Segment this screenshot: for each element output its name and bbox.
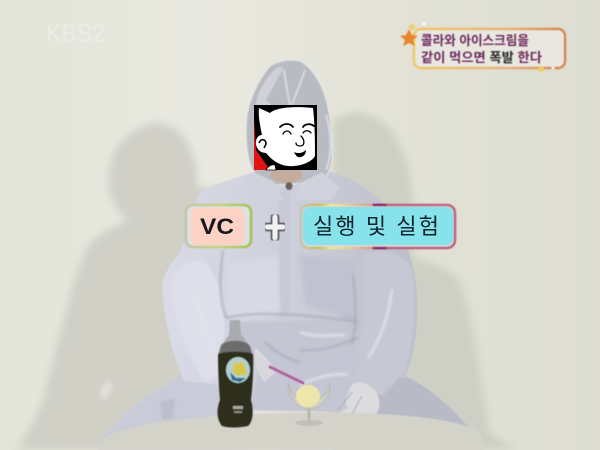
torso shadows (225, 255, 358, 340)
folds (195, 250, 392, 385)
wall highlight spot (97, 379, 115, 401)
nose (296, 136, 304, 146)
collar button (286, 182, 292, 190)
VC pill (191, 208, 244, 245)
left leg (97, 375, 240, 447)
cartoon face mask (254, 105, 317, 170)
frame (301, 205, 455, 248)
pill (303, 207, 453, 245)
caption frame (414, 29, 565, 68)
ice cream glass (288, 383, 330, 426)
wall shadow: right (330, 113, 517, 450)
caption text: 콜라와 아이스크림을 (421, 33, 529, 48)
collar curl (266, 165, 276, 170)
broadcaster logo: KBS2: KBS2 (46, 20, 105, 48)
hood (240, 60, 340, 203)
bottle small print (233, 406, 243, 409)
label text: 실행 및 실험 (313, 214, 439, 239)
ice cream scoop (296, 385, 320, 407)
VC text: VC (200, 214, 234, 239)
lap (228, 320, 358, 412)
wall shadow: left (17, 123, 240, 450)
torso and arms (162, 170, 417, 412)
sparkles (409, 22, 554, 72)
face shape (256, 107, 315, 166)
plus sign (267, 217, 283, 238)
left sleeve highlight (170, 261, 228, 382)
centre placket (278, 190, 290, 318)
mouth (294, 150, 306, 157)
table (97, 413, 484, 450)
neck skin (270, 167, 302, 183)
label: VC (186, 205, 251, 247)
label: 실행 및 실험 (301, 205, 455, 248)
ear detail (259, 140, 266, 148)
caption text (421, 33, 542, 65)
caption tag (400, 22, 565, 72)
bottle label (226, 357, 250, 383)
collar (240, 172, 340, 203)
suit body (97, 170, 468, 447)
VC frame (186, 205, 251, 247)
gloved hand: left (254, 348, 276, 382)
icon: orange star (400, 29, 418, 46)
caption text: 같이 먹으면 폭발 한다 (421, 50, 542, 65)
eyes and brows (280, 124, 314, 127)
gloved hand: right (338, 382, 379, 421)
person in protective suit (97, 60, 468, 447)
right sleeve (352, 252, 415, 396)
spoon (270, 367, 303, 383)
right leg (370, 375, 468, 427)
cola bottle (218, 320, 253, 428)
